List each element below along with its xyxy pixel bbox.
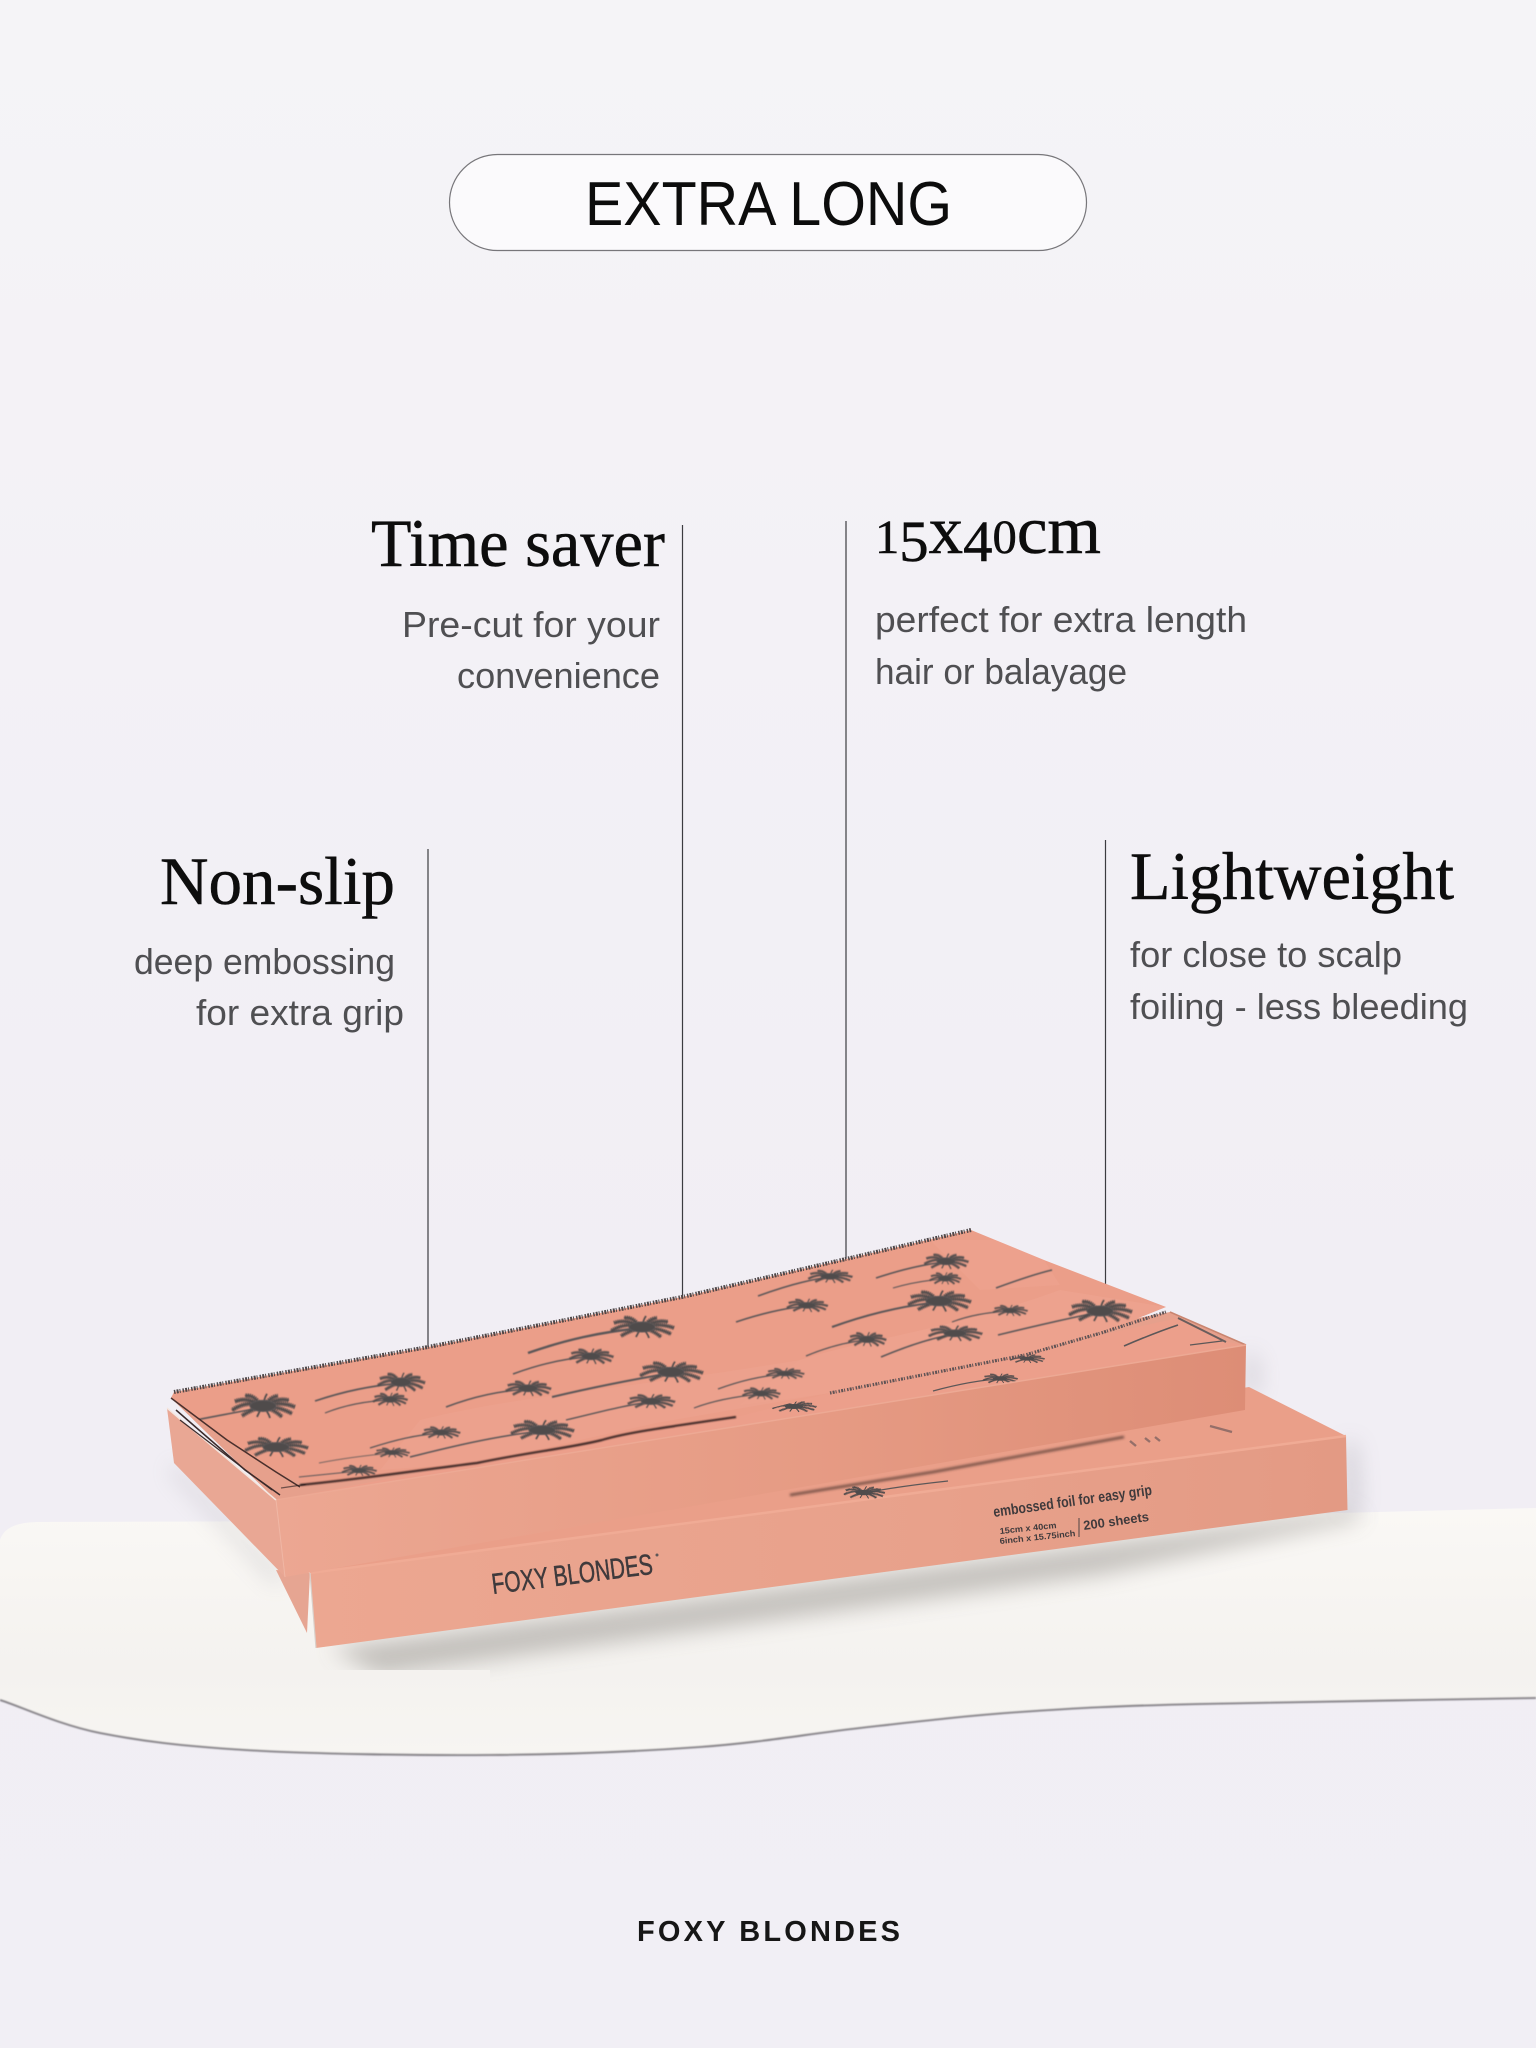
palm print on lid bbox=[790, 1426, 1232, 1498]
box slogan: embossed foil for easy grip bbox=[992, 1482, 1153, 1521]
box shadows bbox=[170, 1350, 1365, 1675]
callout: 15x40cm: 4 bbox=[963, 509, 993, 574]
callout: 15x40cm bbox=[875, 492, 1247, 692]
callout: non-slip: deep embossing bbox=[134, 941, 395, 982]
callout: 15x40cm: cm bbox=[1017, 492, 1101, 568]
lower box side flap bbox=[276, 1570, 310, 1633]
callout: lightweight bbox=[1130, 838, 1468, 1027]
footer brand: FOXY BLONDES bbox=[637, 1916, 900, 1948]
serrated foil edge bbox=[174, 1230, 971, 1392]
callout: 15x40cm: x bbox=[929, 492, 963, 568]
callout: 15x40cm: 5 bbox=[899, 509, 929, 574]
foil highlights bbox=[1031, 1254, 1034, 1256]
foil edge layers bbox=[176, 1410, 350, 1495]
lower box bbox=[276, 1387, 1348, 1648]
box size text: 6inch x 15.75inch bbox=[999, 1528, 1076, 1546]
title pill: EXTRA LONG bbox=[585, 170, 952, 239]
callout: lightweight: for close to scalp bbox=[1130, 934, 1402, 975]
lower box front face bbox=[310, 1436, 1348, 1648]
tray interior and lower foil sheet bbox=[173, 1311, 1246, 1500]
callout: 15x40cm: hair or balayage bbox=[875, 651, 1127, 692]
callout: lightweight: Lightweight bbox=[1130, 838, 1454, 914]
callout: time saver: Time saver bbox=[371, 505, 665, 581]
leader line: 15x40cm bbox=[845, 521, 847, 1260]
callout: non-slip: for extra grip bbox=[196, 992, 404, 1033]
upper box front face bbox=[276, 1345, 1246, 1577]
callout: time saver bbox=[371, 505, 665, 696]
palm tree print on foil bbox=[196, 1254, 1132, 1477]
top foil sheet bbox=[171, 1230, 1166, 1485]
white platform bbox=[0, 1508, 1536, 1755]
callout: time saver: convenience bbox=[457, 655, 660, 696]
title pill bbox=[450, 154, 1086, 250]
callout: 15x40cm: 0 bbox=[993, 511, 1017, 564]
callout: 15x40cm: perfect for extra length bbox=[875, 599, 1247, 640]
leader line: time saver bbox=[682, 525, 684, 1298]
box size text: 15cm x 40cm bbox=[999, 1520, 1057, 1536]
lower box lid bbox=[310, 1387, 1346, 1573]
box size text bbox=[999, 1520, 1076, 1546]
callout: 15x40cm: 1 bbox=[875, 511, 899, 564]
callout: time saver: Pre-cut for your bbox=[402, 604, 660, 645]
leader line: non-slip bbox=[427, 849, 429, 1348]
callout: non-slip bbox=[134, 843, 404, 1033]
registered mark bbox=[656, 1554, 658, 1556]
brand on box: FOXY BLONDES bbox=[490, 1549, 655, 1601]
upper box bbox=[167, 1230, 1250, 1577]
upper box left wall bbox=[167, 1408, 285, 1577]
callout: lightweight: foiling - less bleeding bbox=[1130, 986, 1468, 1027]
leader line: lightweight bbox=[1104, 840, 1106, 1287]
box sheet count: 200 sheets bbox=[1082, 1509, 1150, 1533]
callout: non-slip: Non-slip bbox=[160, 843, 395, 919]
